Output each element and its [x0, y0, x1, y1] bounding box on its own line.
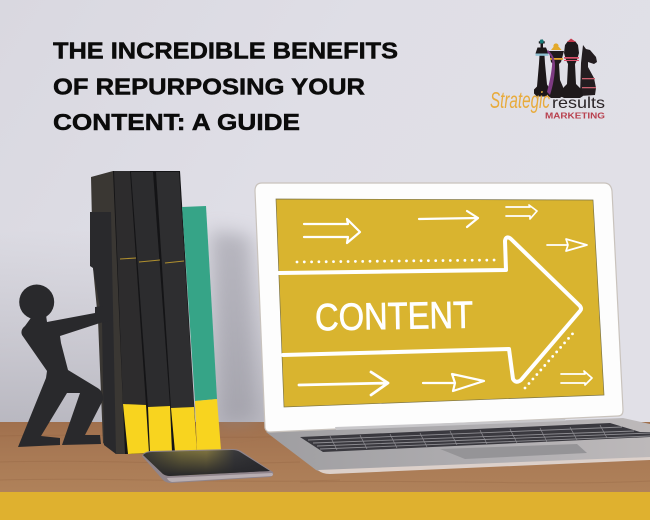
rook queen	[560, 41, 583, 98]
wordmark: Strategic	[490, 87, 550, 113]
dotted line top	[297, 260, 497, 262]
book: black 3	[156, 172, 197, 452]
laptop base	[266, 418, 650, 474]
title: CONTENT: A GUIDE	[53, 109, 300, 135]
arrow: right feather	[547, 239, 587, 251]
bottom accent band	[0, 492, 650, 520]
laptop	[255, 183, 650, 474]
arrow: double top right	[506, 205, 537, 219]
big content arrow	[279, 237, 581, 382]
trackpad	[440, 444, 587, 459]
screen label: CONTENT	[315, 295, 473, 339]
title: THE INCREDIBLE BENEFITS	[53, 38, 398, 64]
arrow: bottom left	[299, 372, 388, 395]
keyboard	[300, 423, 650, 452]
book: teal	[182, 206, 221, 451]
title	[53, 38, 398, 135]
logo: Strategic Results Marketing	[490, 38, 605, 120]
bookend plate	[90, 212, 116, 454]
book block dark gaps	[113, 171, 197, 454]
dotted line diagonal	[525, 331, 575, 388]
arrow: double bottom right	[561, 371, 592, 385]
icon: pushing figure	[18, 284, 112, 447]
title: OF REPURPOSING YOUR	[53, 74, 365, 100]
arrow: bottom middle	[423, 374, 484, 391]
book: black 1	[114, 171, 149, 454]
book: black 2	[131, 172, 172, 453]
king	[534, 40, 549, 96]
laptop lid	[255, 183, 623, 432]
laptop screen	[276, 199, 604, 407]
icon: chess pieces	[534, 38, 597, 98]
arrow: double top left	[304, 219, 360, 243]
logo: Strategic Results Marketing: results	[552, 95, 605, 112]
queen	[548, 51, 564, 98]
logo: Strategic Results Marketing: MARKETING	[545, 112, 605, 120]
wooden desk	[0, 422, 650, 494]
books and bookend figure	[18, 171, 221, 454]
arrow: top middle	[419, 211, 478, 227]
book: outer dark cover	[91, 171, 133, 454]
book shadow on wall	[210, 230, 258, 425]
knight	[580, 45, 597, 96]
phone on desk	[142, 449, 273, 483]
